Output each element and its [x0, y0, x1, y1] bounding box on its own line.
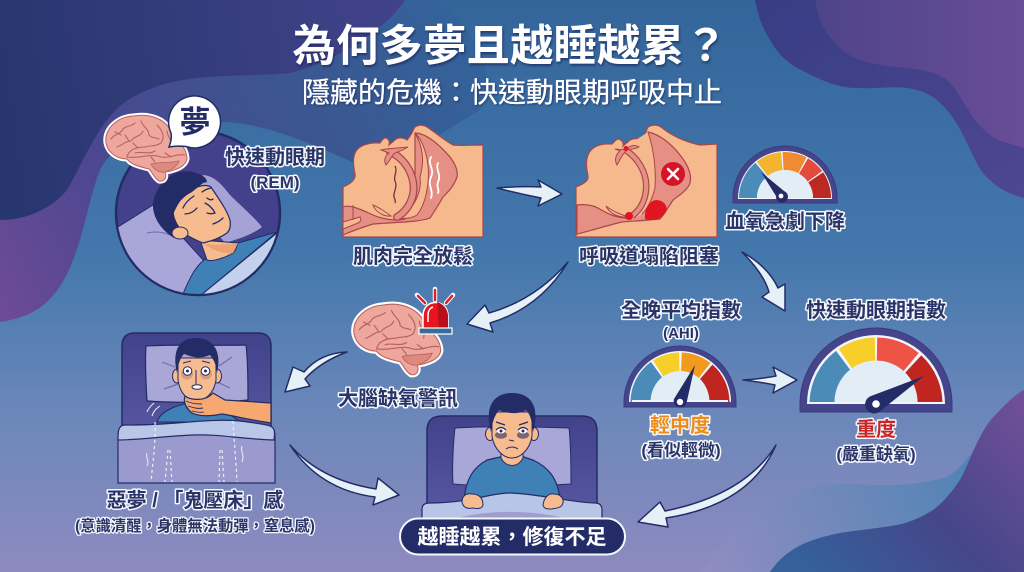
- banner: conclusion: 越睡越累，修復不足: [418, 526, 606, 549]
- arrow: [290, 445, 399, 505]
- label: severe: [836, 418, 916, 464]
- label: REM: [225, 146, 325, 192]
- label: mild moderate: 輕中度: [650, 414, 710, 437]
- subtitle: 隱藏的危機：快速動眼期呼吸中止: [302, 77, 722, 108]
- arrow: [285, 352, 347, 392]
- label: mild moderate: (看似輕微): [641, 441, 721, 460]
- label: airway collapse: 呼吸道塌陷阻塞: [579, 244, 719, 268]
- icon: blocked mark: [661, 162, 685, 186]
- label: severe: 重度: [856, 418, 896, 441]
- arrow: [467, 262, 568, 332]
- speech bubble: dream: 夢: [180, 105, 210, 140]
- illustration: relaxed muscle airway: [343, 125, 483, 237]
- arrow: [497, 180, 562, 206]
- banner: conclusion: [400, 518, 625, 554]
- arrow: [742, 252, 785, 311]
- gauge: blood oxygen: [733, 146, 837, 203]
- icon: brain alarm: [354, 289, 453, 375]
- illustration: nightmare person in bed: [118, 333, 275, 483]
- label: severe: (嚴重缺氧): [836, 445, 916, 464]
- illustration: collapsed airway: [576, 125, 717, 237]
- illustration: tired person in bed: [422, 393, 602, 520]
- label: REM index heading: 快速動眼期指數: [806, 299, 946, 322]
- label: AHI heading: (AHI): [663, 325, 699, 342]
- speech bubble: dream: [169, 96, 221, 148]
- label: REM: (REM): [250, 173, 300, 192]
- label: nightmare: 惡夢 / 「鬼壓床」感: [107, 488, 283, 512]
- label: AHI heading: 全晚平均指數: [621, 299, 741, 322]
- label: mild moderate: [641, 414, 721, 460]
- gauge: AHI: [624, 346, 736, 408]
- label: blood oxygen drop: 血氧急劇下降: [725, 210, 845, 233]
- label: nightmare: [75, 488, 315, 535]
- label: brain warning: 大腦缺氧警訊: [338, 386, 458, 410]
- icon: sleeping person in circle: [116, 131, 282, 300]
- arrow: [743, 367, 797, 393]
- label: AHI heading: [621, 299, 741, 342]
- label: REM: 快速動眼期: [225, 146, 325, 169]
- gauge: REM index: [800, 328, 952, 413]
- arrow: [638, 445, 776, 527]
- label: nightmare: (意識清醒，身體無法動彈，窒息感): [75, 517, 315, 535]
- title: 為何多夢且越睡越累？: [292, 23, 728, 71]
- label: muscle relax: 肌肉完全放鬆: [353, 244, 473, 268]
- icon: brain with dream: [106, 115, 187, 181]
